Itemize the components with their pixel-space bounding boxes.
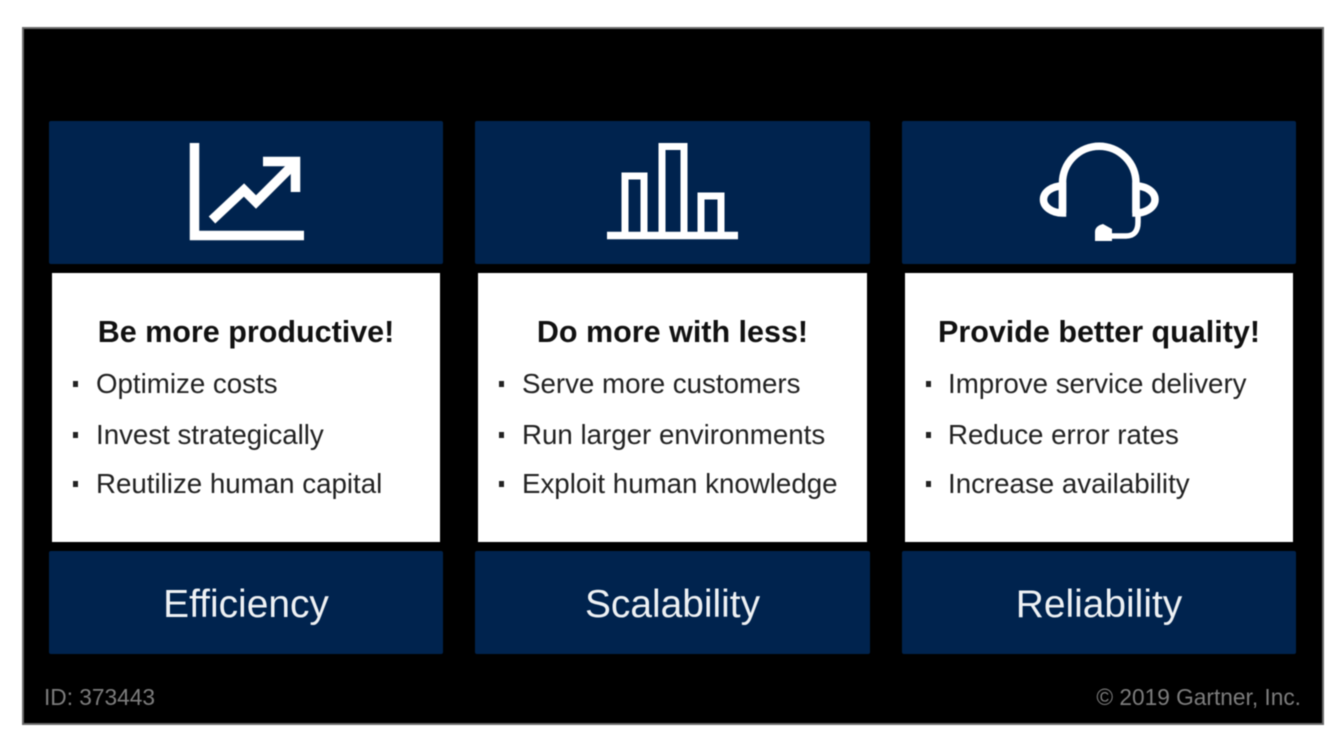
bullet: reutilize human capital: Reutilize human capital <box>96 468 382 499</box>
bullet: reduce error rates: Reduce error rates <box>948 418 1179 450</box>
heading: be more productive: Be more productive! <box>98 315 394 349</box>
bullet: exploit human knowledge: Exploit human knowledge <box>522 468 838 499</box>
panel: do more with less <box>478 273 867 542</box>
bullet: improve service delivery: Improve service delivery <box>948 368 1247 398</box>
panel: reliability icon header <box>902 121 1296 264</box>
panel: scalability icon header <box>475 121 870 264</box>
label bar: efficiency: Efficiency <box>163 583 329 626</box>
heading: provide better quality: Provide better quality! <box>938 315 1260 349</box>
panel: provide better quality <box>905 273 1293 542</box>
label bar: reliability: Reliability <box>1016 583 1182 626</box>
panel: be more productive <box>52 273 440 542</box>
bullet: increase availability: Increase availability <box>948 468 1190 499</box>
label bar: efficiency <box>49 551 443 654</box>
label bar: scalability: Scalability <box>585 583 760 626</box>
footer: copyright: © 2019 Gartner, Inc. <box>1096 684 1301 710</box>
label bar: scalability <box>475 551 870 654</box>
heading: do more with less: Do more with less! <box>537 315 808 349</box>
bullet: run larger environments: Run larger environments <box>522 418 825 450</box>
bullet: optimize costs: Optimize costs <box>96 368 278 398</box>
footer: id: ID: 373443 <box>44 684 155 710</box>
label bar: reliability <box>902 551 1296 654</box>
bullet: invest strategically: Invest strategically <box>96 418 324 450</box>
panel: efficiency icon header <box>49 121 443 264</box>
bullet: serve more customers: Serve more customers <box>522 368 800 398</box>
